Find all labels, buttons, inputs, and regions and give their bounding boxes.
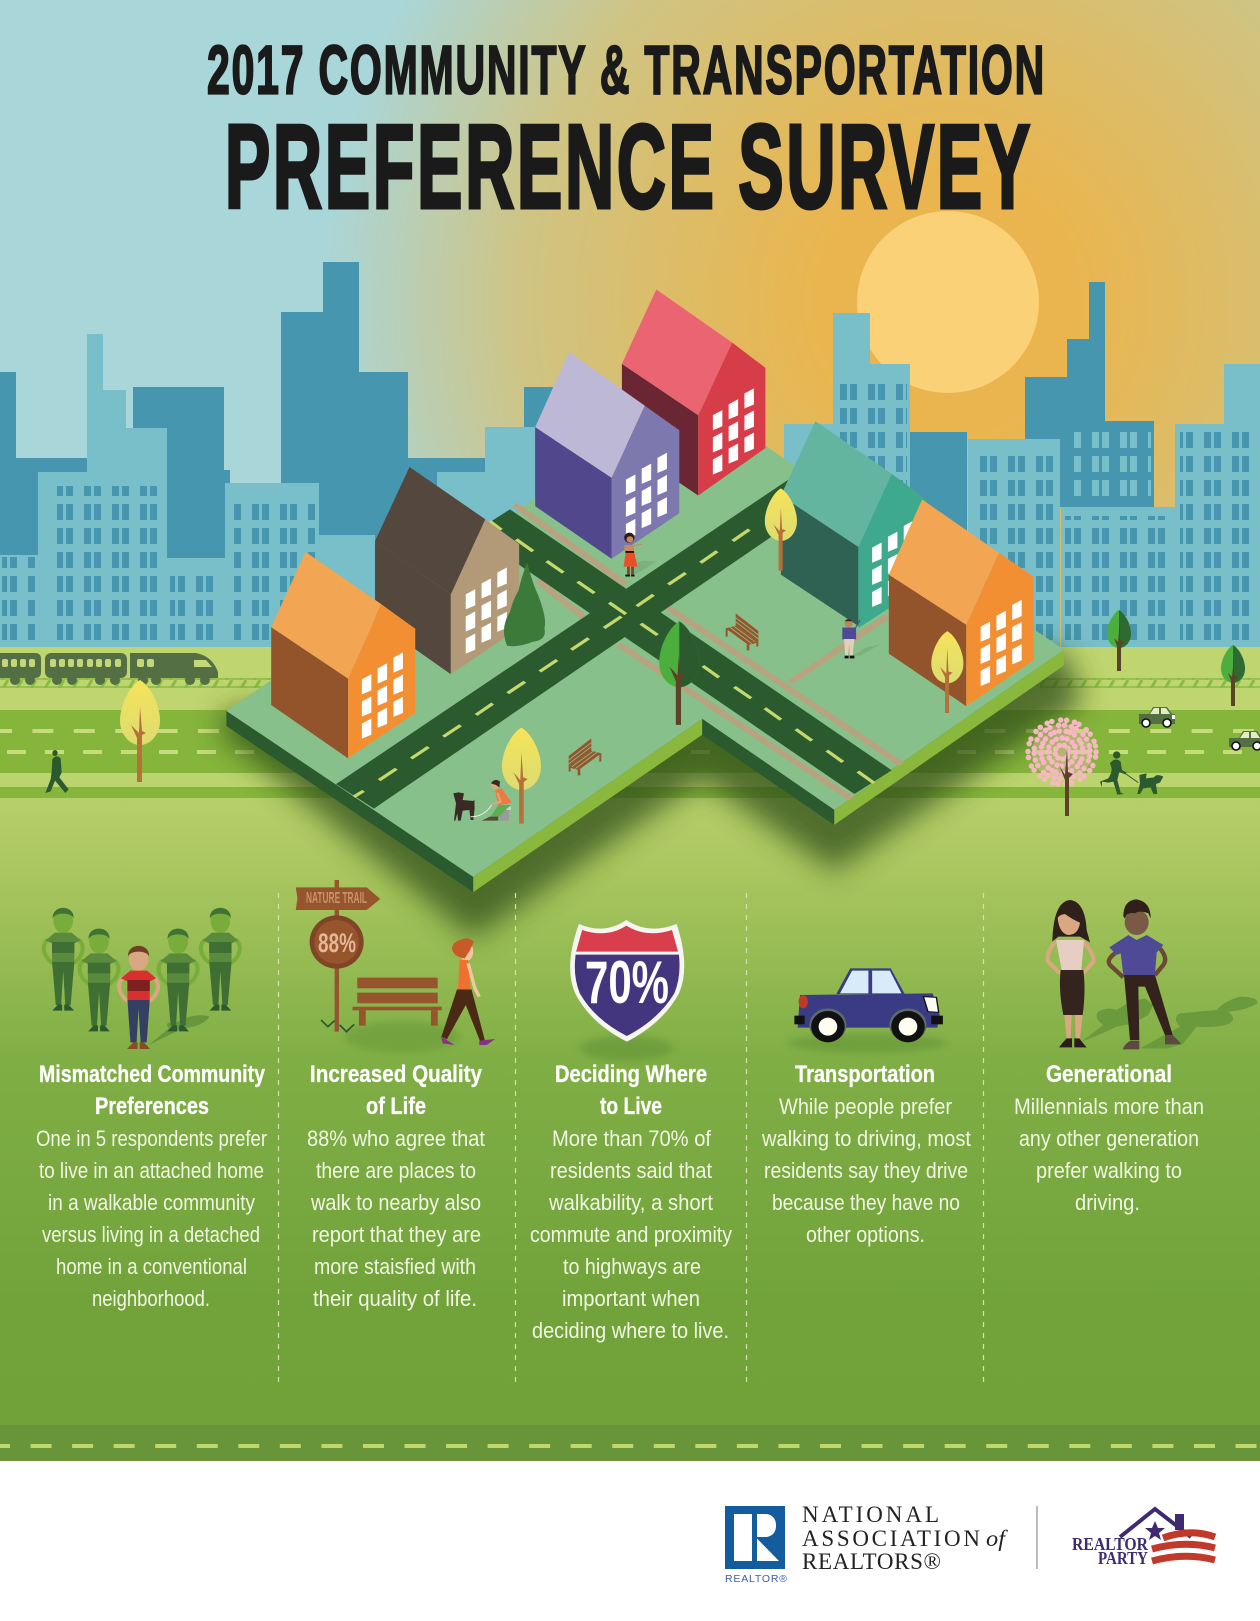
train xyxy=(0,653,218,685)
column: Increased Quality of Life xyxy=(307,1061,485,1311)
icon: nature trail sign, bench and walker: NATURE TRAIL xyxy=(306,890,367,907)
logo: Realtor Party: PARTY xyxy=(1098,1548,1148,1568)
column: Mismatched Community Preferences: home in a conventional xyxy=(56,1254,247,1279)
house: purple xyxy=(535,352,679,559)
road running down-left xyxy=(336,476,794,809)
column: Mismatched Community Preferences: in a walkable community xyxy=(48,1190,255,1215)
jogger with dog xyxy=(1100,751,1163,795)
column: Generational: driving. xyxy=(1075,1190,1140,1215)
column: Deciding Where to Live: Deciding Where xyxy=(555,1061,707,1088)
icon: couple xyxy=(1047,899,1257,1049)
column: Mismatched Community Preferences: Preferences xyxy=(95,1093,209,1120)
logo separator xyxy=(1036,1506,1038,1569)
house: brown xyxy=(375,467,519,674)
icon: blue car xyxy=(788,968,947,1053)
icon: highway shield 70%: 70% xyxy=(585,949,669,1016)
column: Transportation: other options. xyxy=(806,1222,925,1247)
column: Generational: Millennials more than xyxy=(1014,1094,1204,1119)
logo: National Association of Realtors wordmark: NATIONAL xyxy=(802,1502,939,1527)
icon: nature trail sign, bench and walker xyxy=(296,880,495,1053)
logo: National Association of Realtors wordmark: REALTORS® xyxy=(802,1549,941,1574)
column: Deciding Where to Live: to highways are xyxy=(563,1254,701,1279)
column: Increased Quality of Life: report that they are xyxy=(312,1222,481,1247)
column: Generational: any other generation xyxy=(1019,1126,1199,1151)
column: Mismatched Community Preferences: versus living in a detached xyxy=(42,1222,260,1247)
tree: yellow front xyxy=(502,728,541,824)
column: Increased Quality of Life: walk to nearby also xyxy=(310,1190,481,1215)
column: Increased Quality of Life: Increased Quality xyxy=(310,1061,483,1088)
tree: yellow upper xyxy=(765,488,797,571)
column: Increased Quality of Life: more staisfied with xyxy=(314,1254,476,1279)
platform shadow xyxy=(217,650,1084,938)
skyline: city buildings xyxy=(0,262,1260,652)
column: Deciding Where to Live: More than 70% of xyxy=(552,1126,712,1151)
column: Generational: prefer walking to xyxy=(1036,1158,1182,1183)
road lane dashes xyxy=(0,731,1260,752)
car on road 2 xyxy=(1229,731,1260,750)
logo: National Association of Realtors wordmark: ASSOCIATION xyxy=(802,1526,980,1551)
tree: green right 1 xyxy=(1107,610,1131,671)
column: Mismatched Community Preferences: neighborhood. xyxy=(92,1286,210,1311)
man waving xyxy=(843,619,880,658)
column: Increased Quality of Life: their quality of life. xyxy=(313,1286,477,1311)
house: red xyxy=(622,289,765,495)
column: Increased Quality of Life: of Life xyxy=(366,1093,426,1120)
column: Deciding Where to Live: walkability, a short xyxy=(548,1190,713,1215)
person sitting with dog xyxy=(453,780,512,821)
logo: Realtor Party: REALTOR xyxy=(1072,1534,1149,1554)
bush xyxy=(504,563,545,646)
column: Transportation: walking to driving, most xyxy=(761,1126,971,1151)
house: orange left xyxy=(271,552,415,758)
house: teal xyxy=(781,421,926,628)
footpaths xyxy=(515,505,901,799)
isometric neighbourhood platform xyxy=(217,289,1084,938)
woman waving xyxy=(624,533,656,577)
tree: yellow right xyxy=(931,631,963,713)
column: Deciding Where to Live: deciding where to live. xyxy=(532,1318,729,1343)
column: Transportation: residents say they drive xyxy=(764,1158,968,1183)
column: Mismatched Community Preferences: One in 5 respondents prefer xyxy=(36,1126,267,1151)
column dividers xyxy=(278,893,984,1385)
column: Mismatched Community Preferences: Mismatched Community xyxy=(39,1061,266,1088)
logo: Realtor Party xyxy=(1072,1509,1215,1568)
column: Transportation: Transportation xyxy=(795,1061,935,1088)
tree: green centre xyxy=(659,621,699,725)
railway track xyxy=(0,678,1260,688)
tree: green right 2 xyxy=(1221,645,1245,706)
logo: REALTOR block R xyxy=(725,1506,787,1585)
column: Mismatched Community Preferences xyxy=(36,1061,267,1311)
column: Increased Quality of Life: there are places to xyxy=(316,1158,476,1183)
column: Transportation: because they have no xyxy=(772,1190,960,1215)
column: Deciding Where to Live: commute and proximity xyxy=(530,1222,732,1247)
column: Increased Quality of Life: 88% who agree that xyxy=(307,1126,485,1151)
road centre dashes xyxy=(354,521,874,797)
platform top xyxy=(226,393,1064,877)
column: Generational: Generational xyxy=(1046,1061,1172,1088)
bench lower xyxy=(569,738,601,775)
bench upper xyxy=(726,613,758,650)
pedestrian silhouette xyxy=(45,750,69,793)
title xyxy=(207,32,1046,234)
column: Deciding Where to Live: important when xyxy=(562,1286,700,1311)
icon: group of people, one highlighted xyxy=(44,908,240,1049)
column: Deciding Where to Live: to Live xyxy=(600,1093,662,1120)
sun xyxy=(857,211,1039,393)
column: Deciding Where to Live xyxy=(530,1061,732,1343)
bottom road band xyxy=(0,1425,1260,1461)
column: Mismatched Community Preferences: to live in an attached home xyxy=(39,1158,264,1183)
house: orange right xyxy=(889,499,1033,706)
logo: REALTOR block R: REALTOR® xyxy=(725,1573,787,1585)
car on road 1 xyxy=(1139,707,1175,727)
logo: National Association of Realtors wordmark: of xyxy=(986,1526,1009,1551)
footer background xyxy=(0,1461,1260,1621)
road running down-right xyxy=(473,509,892,794)
column: Deciding Where to Live: residents said that xyxy=(550,1158,712,1183)
column: Transportation: While people prefer xyxy=(779,1094,952,1119)
sky background xyxy=(0,0,1260,650)
column: Generational xyxy=(1014,1061,1204,1215)
icon: nature trail sign, bench and walker: 88% xyxy=(318,928,356,958)
tree: yellow left xyxy=(120,680,160,782)
ground xyxy=(0,647,1260,1425)
icon: highway shield 70% xyxy=(570,920,684,1061)
cherry blossom tree xyxy=(1028,720,1096,816)
column: Transportation xyxy=(761,1061,971,1247)
logo: National Association of Realtors wordmark xyxy=(802,1502,1009,1574)
